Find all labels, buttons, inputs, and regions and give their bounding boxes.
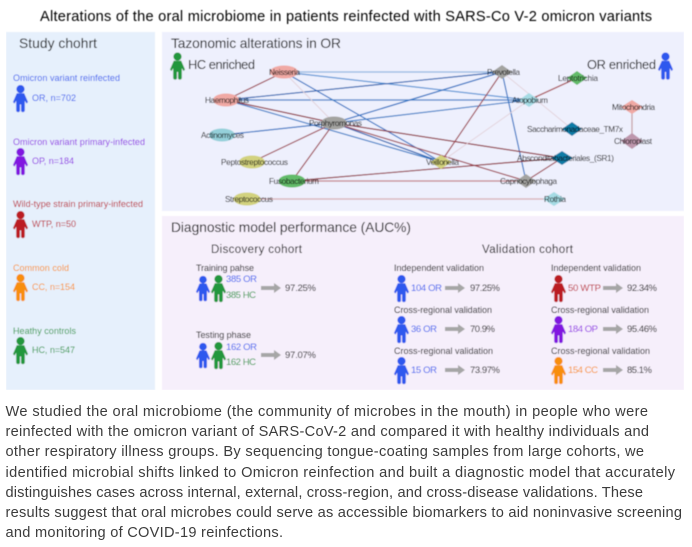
heading: discovery cohort: Discovery cohort: [211, 244, 303, 256]
cohort: omicron primary-infected: Omicron variant primary-infected: [13, 137, 145, 147]
training phase: 385 HC: [226, 290, 256, 301]
validation: 104 OR: [394, 263, 501, 302]
validation: 184 OP: 184 OP: [568, 324, 598, 335]
validation: 154 CC: 154 CC: [568, 365, 598, 376]
validation: 50 WTP: 50 WTP: [568, 283, 601, 294]
network labels: Capnocytophaga: [500, 177, 557, 186]
heading: validation cohort: Validation cohort: [482, 244, 574, 256]
cohort: wild-type primary-infected: Wild-type strain primary-infected: [13, 199, 143, 209]
network edges: [222, 72, 632, 199]
panel: study cohort: [6, 32, 155, 390]
network labels: Streptococcus: [225, 195, 273, 204]
network labels: Haemophilus: [205, 96, 249, 105]
cohort: wild-type primary-infected: [13, 199, 143, 238]
cohort: common cold: Common cold: [13, 263, 69, 273]
training phase: 97.25%: [285, 283, 317, 294]
cohort: common cold: CC, n=154: [32, 282, 75, 292]
validation: 104 OR: 104 OR: [411, 283, 442, 294]
testing phase: 97.07%: [285, 350, 317, 361]
validation: 15 OR: 73.97%: [470, 365, 501, 376]
network labels: Fusobacterium: [269, 177, 319, 186]
cohort: omicron reinfected: Omicron variant reinfected: [13, 73, 120, 83]
legend: HC enriched: [170, 52, 255, 80]
summary text block: and monitoring of COVID-19 reinfections.: [6, 525, 283, 541]
summary text block: [6, 404, 682, 541]
validation: 36 OR: 36 OR: [411, 324, 437, 335]
summary text block: distinguishes cases across internal, external, cross-region, and cross-disease validations. These: [6, 485, 643, 501]
heading: taxonomic alterations: Tazonomic alterations in OR: [171, 36, 341, 51]
legend: OR enriched: OR enriched: [587, 57, 656, 72]
network labels: Rothia: [544, 195, 566, 204]
cohort: healthy controls: Heathy controls: [13, 326, 76, 336]
validation: 154 CC: Cross-regional validation: [551, 346, 650, 356]
network nodes: [209, 65, 643, 206]
validation: 36 OR: Cross-regional validation: [394, 305, 492, 315]
validation: 184 OP: [551, 305, 658, 343]
validation: 50 WTP: Independent validation: [551, 263, 641, 273]
summary text block: reinfected with the omicron variant of SARS-CoV-2 and compared it with healthy individuals and: [6, 424, 649, 440]
testing phase: 162 HC: [226, 357, 256, 368]
summary text block: identified microbial shifts linked to Omicron reinfection and built a diagnostic model that accurately: [6, 465, 676, 481]
testing phase: 162 OR: [226, 342, 257, 353]
network labels: Leptotrichia: [558, 74, 598, 83]
network labels: Peptostreptococcus: [221, 158, 288, 167]
summary text block: other respiratory illness groups. By sequencing tongue-coating samples from large cohorts, we: [6, 444, 644, 460]
network labels: Absconditabacteriales_(SR1): [517, 154, 614, 163]
validation: 104 OR: 97.25%: [470, 283, 501, 294]
summary text block: We studied the oral microbiome (the community of microbes in the mouth) in people who were: [6, 404, 648, 420]
network labels: Saccharimonadaceae_TM7x: [527, 125, 623, 134]
network labels: Atopobium: [512, 96, 548, 105]
legend: OR enriched: [587, 52, 673, 80]
training phase: 385 OR: [226, 274, 257, 285]
validation: 104 OR: Independent validation: [394, 263, 484, 273]
network labels: Porphyromonas: [309, 119, 362, 128]
cohort: wild-type primary-infected: WTP, n=50: [32, 219, 76, 229]
validation: 184 OP: 95.46%: [627, 324, 658, 335]
testing phase: [196, 330, 317, 369]
network labels: Veillonella: [426, 158, 459, 167]
cohort: healthy controls: [13, 326, 76, 364]
validation: 50 WTP: 92.34%: [627, 283, 658, 294]
legend: HC enriched: HC enriched: [188, 57, 255, 72]
cohort: common cold: [13, 263, 75, 301]
cohort: omicron primary-infected: [13, 137, 145, 175]
cohort: omicron primary-infected: OP, n=184: [32, 156, 74, 166]
network labels: Chloroplast: [614, 137, 653, 146]
cohort: omicron reinfected: OR, n=702: [32, 93, 76, 103]
validation: 15 OR: 15 OR: [411, 365, 437, 376]
validation: 36 OR: 70.9%: [470, 324, 496, 335]
cohort: omicron reinfected: [13, 73, 120, 112]
training phase: [196, 263, 317, 302]
network labels: Neisseria: [269, 68, 300, 77]
heading: study cohort: Study chohrt: [19, 36, 97, 51]
heading: diagnostic model: Diagnostic model performance (AUC%): [171, 220, 411, 235]
network labels: Prevotella: [487, 68, 520, 77]
panel: taxonomic alterations: [162, 32, 684, 211]
network labels: Mitochondria: [612, 103, 655, 112]
network labels: [201, 68, 655, 204]
training phase: Training pahse: [196, 263, 254, 273]
validation: 184 OP: Cross-regional validation: [551, 305, 649, 315]
cohort: healthy controls: HC, n=547: [32, 345, 75, 355]
validation: 50 WTP: [551, 263, 658, 302]
validation: 15 OR: Cross-regional validation: [394, 346, 493, 356]
validation: 36 OR: [394, 305, 496, 343]
title: Alterations of the oral microbiome in patients reinfected with SARS-Co V-2 omicron variants: [40, 9, 652, 25]
network labels: Actinomyces: [201, 131, 244, 140]
validation: 154 CC: 85.1%: [627, 365, 653, 376]
validation: 15 OR: [394, 346, 501, 384]
validation: 154 CC: [551, 346, 653, 384]
summary text block: results suggest that oral microbes could serve as accessible biomarkers to aid noninvasive screening: [6, 505, 682, 521]
testing phase: Testing phase: [196, 330, 251, 340]
panel: diagnostic model performance: [162, 216, 684, 390]
